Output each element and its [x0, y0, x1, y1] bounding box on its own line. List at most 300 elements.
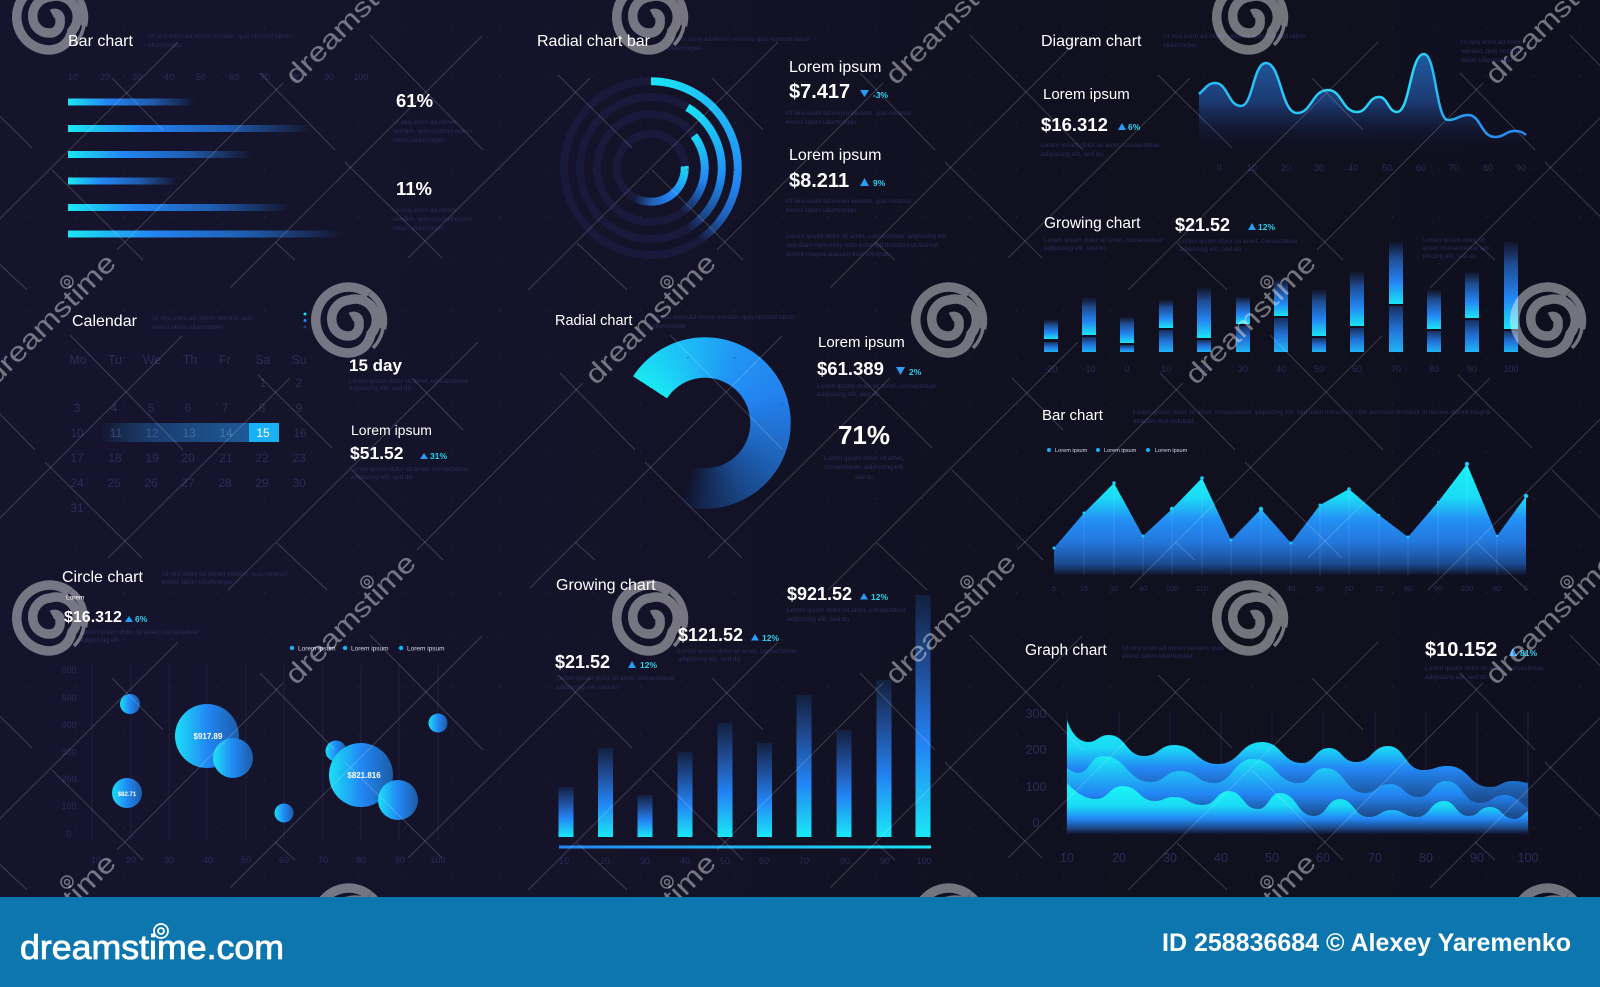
- axis labels: 0: [1124, 364, 1130, 374]
- side note: [1461, 39, 1524, 64]
- axis labels: 80: [840, 856, 850, 866]
- axis labels: 70: [1391, 364, 1401, 374]
- panel: circle chart: [61, 569, 448, 865]
- x axis labels: 50: [241, 855, 251, 865]
- x axis labels: 10: [91, 855, 101, 865]
- stat $121.52: [678, 625, 798, 663]
- stat $7.417: -3%: [873, 90, 889, 100]
- axis labels: 80: [1429, 364, 1439, 374]
- descriptions: adipiscing elit, sed do: [1044, 245, 1107, 252]
- date grid: 4: [111, 401, 118, 415]
- panel: bar chart right: [1042, 407, 1528, 593]
- y axis labels: 100: [61, 801, 77, 811]
- x axis labels: 80: [1419, 851, 1433, 865]
- descriptions: adipiscing elit, sed do: [1179, 246, 1242, 253]
- stat $21.52: $21.52: [555, 652, 610, 672]
- date grid: 8: [259, 401, 266, 415]
- heading: Bar chart: [68, 33, 133, 50]
- axis labels: 70: [1449, 163, 1459, 173]
- axis labels: 100: [916, 856, 932, 866]
- stat $21.52: [1175, 215, 1275, 235]
- date grid: 12: [145, 426, 159, 440]
- date grid: 7: [222, 401, 229, 415]
- stat $921.52: [787, 584, 907, 623]
- stat $921.52: adipiscing elit, sed do: [787, 616, 850, 623]
- description: Ut wisi enim ad minim veniam, quis: [152, 315, 254, 322]
- heading: Radial chart bar: [537, 33, 651, 50]
- axis labels: [1044, 364, 1519, 374]
- layered wave area chart: [1067, 720, 1528, 834]
- watermark text: dreamstime: [279, 547, 422, 690]
- description: Ut wisi enim ad minim veniam, quis: [1122, 645, 1224, 652]
- description: Ut wisi enim ad minim veniam, quis nostrud: [162, 571, 287, 578]
- radial bar arc: outer: [651, 77, 742, 242]
- descriptions: Lorem ipsum dolor sit: [1423, 237, 1485, 244]
- axis labels: 70: [799, 856, 809, 866]
- date grid: 6: [185, 401, 192, 415]
- axis labels: 30: [1110, 584, 1118, 593]
- stat 61%: veniam, quis nostrud exerci: [393, 128, 472, 135]
- legend: Lorem ipsum: [298, 646, 336, 652]
- stat 11%: [393, 178, 472, 232]
- axis labels: 10: [1161, 364, 1171, 374]
- bubble labels: $917.89: [194, 732, 223, 741]
- watermark text: dreamstime: [1479, 547, 1600, 690]
- stat $51.52: [350, 422, 470, 481]
- panel: radial chart: [555, 313, 937, 481]
- y axis labels: 300: [61, 747, 77, 757]
- stat $61.389: 2%: [909, 367, 922, 377]
- vertical bars: [558, 595, 930, 837]
- x axis labels: [91, 855, 446, 865]
- stat $10.152: Lorem ipsum dolor sit amet, consectetuer: [1425, 665, 1545, 672]
- axis labels: 50: [1382, 163, 1392, 173]
- line area chart: [1199, 54, 1526, 150]
- descriptions: piscing elit, sed do: [1423, 253, 1477, 260]
- axis labels: 5: [1052, 584, 1056, 593]
- paragraph: Lorem ipsum dolor sit amet, consectetuer adipiscing elit,: [786, 233, 948, 240]
- axis labels: 30: [640, 856, 650, 866]
- watermark text: dreamstime: [1179, 247, 1322, 390]
- weekday header: Tu: [108, 353, 122, 367]
- radial bar arc: inner: [634, 166, 689, 206]
- description: Ut wisi enim ad minim veniam, quis nostrud tation: [1163, 33, 1306, 40]
- panel: growing chart center: [555, 577, 932, 866]
- weekday header: Sa: [255, 353, 271, 367]
- axis labels: 20: [100, 72, 110, 82]
- y axis labels: 0: [1033, 816, 1040, 830]
- stat 15 day: adipiscing elit, sed do: [349, 385, 412, 392]
- stat $8.211: $8.211: [789, 170, 849, 192]
- stat 15 day: Lorem ipsum dolor sit amet, consectetuer: [349, 378, 469, 385]
- stat $16.312: 6%: [1128, 122, 1141, 132]
- horizontal bars: [68, 98, 343, 238]
- description: [1122, 645, 1224, 660]
- axis labels: 90: [880, 856, 890, 866]
- axis labels: 40: [164, 72, 174, 82]
- stat $16.312: Lorem: [66, 594, 84, 602]
- stat $51.52: Lorem ipsum dolor sit amet, consectetuer: [350, 466, 470, 473]
- description: Ut wisi enim ad minim veniam, quis nostrud tation: [148, 33, 291, 40]
- axis labels: 10: [68, 72, 78, 82]
- y axis labels: 400: [61, 720, 77, 730]
- date grid: 10: [70, 426, 84, 440]
- x axis labels: 20: [1112, 851, 1126, 865]
- description: [148, 33, 291, 49]
- x axis labels: 60: [1316, 851, 1330, 865]
- y axis labels: 600: [61, 665, 77, 675]
- stat $21.52: 12%: [640, 660, 657, 670]
- stat $61.389: adipiscing elit, sed do: [817, 391, 880, 398]
- stat $16.312: Lorem ipsum dolor sit amet, consectetuer: [80, 629, 200, 636]
- axis labels: 10: [559, 856, 569, 866]
- stat 11%: 11%: [396, 178, 432, 199]
- axis labels: 80: [1404, 584, 1412, 593]
- stat $21.52: [555, 652, 676, 691]
- date grid: 25: [107, 476, 121, 490]
- description: Ut wisi enim ad minim veniam, quis nostrud tation: [652, 314, 795, 321]
- panel: growing chart right: [1044, 215, 1519, 374]
- date grid: 24: [70, 476, 84, 490]
- y axis labels: [61, 665, 77, 839]
- stat $7.417: Lorem ipsum: [789, 59, 881, 76]
- stat 71%: sed do: [854, 474, 874, 481]
- x axis labels: 90: [395, 855, 405, 865]
- weekday header: Th: [183, 353, 197, 367]
- stat $10.152: $10.152: [1425, 639, 1497, 661]
- date grid: [70, 376, 307, 515]
- date grid: 3: [74, 401, 81, 415]
- heading: Growing chart: [1044, 215, 1141, 232]
- footer band: [0, 897, 1600, 987]
- date grid: 30: [292, 476, 306, 490]
- stat $51.52: $51.52: [350, 443, 404, 463]
- x axis labels: 90: [1470, 851, 1484, 865]
- date grid: 18: [108, 451, 122, 465]
- description: [652, 314, 795, 330]
- date grid: 5: [148, 401, 155, 415]
- axis labels: 90: [324, 72, 334, 82]
- x axis labels: 10: [1060, 851, 1074, 865]
- bubbles: [112, 694, 448, 822]
- axis labels: [68, 72, 369, 82]
- axis labels: 40: [1139, 584, 1147, 593]
- stat $61.389: [817, 334, 937, 398]
- axis labels: 90: [1516, 163, 1526, 173]
- description: exerci tation ullamcorper: [152, 324, 224, 331]
- axis labels: 60: [1416, 163, 1426, 173]
- axis labels: -20: [1044, 364, 1058, 374]
- description: [1163, 33, 1306, 49]
- bubble labels: $821.816: [347, 771, 381, 780]
- paragraph: dolore magna aliquam erat volutpat.: [786, 251, 890, 258]
- stat $121.52: 12%: [762, 633, 779, 643]
- date grid: 27: [181, 476, 195, 490]
- x axis labels: 50: [1265, 851, 1279, 865]
- stat $21.52: adipiscing elit, sed do: [556, 684, 619, 691]
- axis labels: 40: [680, 856, 690, 866]
- axis labels: 90: [1434, 584, 1442, 593]
- stat 71%: [823, 420, 905, 481]
- stat 15 day: [349, 356, 469, 392]
- axis labels: 50: [196, 72, 206, 82]
- stat 11%: Ut wisi enim ad minim: [393, 207, 456, 214]
- descriptions: Lorem ipsum dolor sit amet, consectetuer: [1044, 237, 1164, 244]
- axis labels: 60: [1352, 364, 1362, 374]
- axis labels: 90: [1467, 364, 1477, 374]
- panel: graph chart: [1025, 639, 1545, 865]
- stat $10.152: [1425, 639, 1545, 681]
- stat $10.152: 81%: [1520, 648, 1537, 658]
- axis labels: 80: [292, 72, 302, 82]
- axis labels: 100: [353, 72, 369, 82]
- x axis labels: 40: [1214, 851, 1228, 865]
- bubble labels: [118, 732, 381, 798]
- description: exerci tation ullamcorper: [162, 579, 234, 586]
- stat 11%: tation ullamcorper: [393, 225, 445, 232]
- watermark text: dreamstime: [579, 847, 722, 987]
- description: Lorem ipsum dolor sit amet, consectetuer adipiscing elit, sed diam nonummy nibh euismod tincidunt ut laoreet dolore magna: [1133, 409, 1491, 416]
- panel: calendar: [69, 312, 470, 515]
- legend: Lorem ipsum: [1104, 448, 1137, 454]
- stat $16.312: Lorem ipsum: [1043, 86, 1130, 103]
- x axis labels: 80: [356, 855, 366, 865]
- stat $8.211: 9%: [873, 178, 886, 188]
- panel: diagram chart: [1041, 33, 1526, 173]
- axis labels: 20: [1281, 163, 1291, 173]
- grid lines: [1067, 712, 1528, 835]
- stat 71%: 71%: [838, 420, 890, 450]
- x axis labels: 40: [203, 855, 213, 865]
- axis labels: 70: [260, 72, 270, 82]
- legend: [290, 646, 445, 652]
- legend: [1047, 448, 1188, 454]
- stat $7.417: $7.417: [789, 81, 850, 103]
- footer logo: dreamstime.com: [20, 929, 284, 967]
- x axis labels: 30: [164, 855, 174, 865]
- date grid: 19: [145, 451, 159, 465]
- axis labels: 40: [1287, 584, 1295, 593]
- mountain area chart: [1052, 462, 1528, 575]
- watermark text: dreamstime: [879, 547, 1022, 690]
- stat $7.417: [786, 59, 911, 126]
- description: [1133, 409, 1491, 425]
- y axis labels: 200: [61, 774, 77, 784]
- date grid: 1: [260, 376, 267, 390]
- stat $51.52: 31%: [430, 451, 447, 461]
- axis labels: [1216, 163, 1526, 173]
- date grid: 16: [293, 426, 307, 440]
- axis labels: 80: [1483, 163, 1493, 173]
- axis labels: -10: [1082, 364, 1096, 374]
- axis labels: 40: [1348, 163, 1358, 173]
- side note: Ut wisi enim ad minim: [1461, 39, 1524, 46]
- date grid: 31: [70, 501, 84, 515]
- descriptions: Lorem ipsum dolor sit amet, consectetuer: [1179, 238, 1299, 245]
- stat $7.417: Ut wisi enim ad minim veniam, quis nostrud: [786, 110, 911, 117]
- stat $8.211: exerci tation ullamcorper: [786, 207, 858, 214]
- axis labels: 60: [1345, 584, 1353, 593]
- stat $61.389: $61.389: [817, 358, 884, 379]
- stat $61.389: Lorem ipsum: [818, 334, 905, 351]
- heading: Circle chart: [62, 569, 143, 586]
- date grid: 20: [181, 451, 195, 465]
- stat 11%: veniam, quis nostrud exerci: [393, 216, 472, 223]
- radial chart donut: [619, 337, 791, 509]
- axis labels: 100: [1166, 584, 1178, 593]
- stat $121.52: Lorem ipsum dolor sit amet, consectetuer: [678, 648, 798, 655]
- stat $21.52: $21.52: [1175, 215, 1230, 235]
- stat $16.312: Lorem ipsum dolor sit amet, consectetuer: [1041, 142, 1161, 149]
- date grid: 29: [255, 476, 269, 490]
- date grid: 14: [219, 426, 233, 440]
- description: aliquam erat volutpat.: [1133, 418, 1195, 425]
- stat $16.312: [64, 594, 200, 644]
- stat 61%: [393, 90, 472, 144]
- watermark text: dreamstime: [1179, 847, 1322, 987]
- axis labels: 50: [1316, 584, 1324, 593]
- axis labels: [1052, 584, 1528, 593]
- description: ullamcorper: [652, 323, 687, 330]
- stat $51.52: Lorem ipsum: [351, 422, 432, 438]
- heading: Bar chart: [1042, 407, 1104, 424]
- grid lines: [92, 665, 438, 840]
- stat $8.211: Lorem ipsum: [789, 147, 881, 164]
- axis labels: 20: [1199, 364, 1209, 374]
- axis labels: 20: [600, 856, 610, 866]
- date grid: 11: [110, 426, 123, 440]
- axis labels: 0: [1216, 163, 1222, 173]
- side note: tation ullamcorper: [1461, 57, 1513, 64]
- stat $16.312: adipiscing elit, sed do: [1041, 151, 1104, 158]
- descriptions: amet, consectetuer adi: [1423, 245, 1489, 252]
- stat $921.52: $921.52: [787, 584, 852, 604]
- y axis labels: [1026, 707, 1046, 830]
- descriptions: [1044, 237, 1489, 260]
- heading: Radial chart: [555, 313, 632, 329]
- paragraph: sed diam nonummy nibh euismod tincidunt ut laoreet: [786, 242, 938, 249]
- radial bar arc: third: [681, 133, 709, 214]
- radial bar arc: second: [686, 104, 726, 230]
- stat $16.312: adipiscing elit: [80, 637, 119, 644]
- stat $61.389: Lorem ipsum dolor sit amet, consectetuer: [817, 383, 937, 390]
- selected day box: [249, 423, 279, 442]
- axis labels: 70: [1375, 584, 1383, 593]
- stat 71%: consectetuer, adipiscing elit,: [823, 464, 905, 471]
- axis labels: 30: [1314, 163, 1324, 173]
- legend: Lorem ipsum: [407, 646, 445, 652]
- stat $21.52: Lorem ipsum dolor sit amet, consectetuer: [556, 675, 676, 682]
- legend: Lorem ipsum: [1055, 448, 1088, 454]
- date grid: 15: [256, 426, 270, 440]
- side note: veniam, quis nostrud: [1461, 48, 1521, 55]
- date grid: 9: [296, 401, 303, 415]
- panel: radial chart bar: [537, 33, 948, 258]
- footer logo swirl: [154, 924, 168, 938]
- axis labels: [559, 856, 932, 866]
- description: [667, 36, 810, 52]
- weekday header: Mo: [69, 353, 87, 367]
- stat $8.211: Ut wisi enim ad minim veniam, quis nostrud: [786, 198, 911, 205]
- stat $921.52: Lorem ipsum dolor sit amet, consectetuer: [787, 607, 907, 614]
- date grid: 23: [292, 451, 306, 465]
- heading: Growing chart: [556, 577, 656, 594]
- stacked bars: [1044, 242, 1518, 352]
- date grid: 28: [218, 476, 232, 490]
- stat $121.52: adipiscing elit, sed do: [678, 656, 741, 663]
- stat 61%: 61%: [396, 90, 433, 111]
- heading: Graph chart: [1025, 642, 1108, 659]
- paragraph: [786, 233, 948, 258]
- y axis labels: 100: [1026, 780, 1046, 794]
- axis labels: 40: [1276, 364, 1286, 374]
- x axis labels: 70: [1368, 851, 1382, 865]
- heading: Calendar: [72, 313, 138, 330]
- stat $16.312: 6%: [135, 614, 148, 624]
- menu dots: [304, 312, 306, 328]
- weekday header: Su: [291, 353, 307, 367]
- description: ullamcorper: [148, 42, 183, 49]
- x axis labels: 100: [1518, 851, 1538, 865]
- stat 61%: Ut wisi enim ad minim: [393, 119, 456, 126]
- axis labels: 50: [1314, 364, 1324, 374]
- date grid: 26: [144, 476, 158, 490]
- stat 15 day: 15 day: [349, 356, 402, 375]
- axis labels: 100: [1503, 364, 1519, 374]
- axis labels: 30: [1238, 364, 1248, 374]
- stat $16.312: $16.312: [1041, 114, 1108, 135]
- description: ullamcorper: [667, 45, 702, 52]
- weekday header: Fr: [219, 353, 231, 367]
- axis labels: 110: [1196, 584, 1208, 593]
- weekday header: [69, 353, 307, 367]
- legend: Lorem ipsum: [351, 646, 389, 652]
- stat $21.52: 12%: [1258, 222, 1275, 232]
- stat $7.417: exerci tation ullamcorper: [786, 119, 858, 126]
- description: [152, 315, 254, 331]
- date grid: 21: [219, 451, 233, 465]
- date grid: 13: [182, 426, 196, 440]
- description: [162, 571, 287, 586]
- stat $121.52: $121.52: [678, 625, 743, 645]
- date grid: 17: [70, 451, 84, 465]
- legend: Lorem ipsum: [1155, 448, 1188, 454]
- y axis labels: 500: [61, 693, 77, 703]
- x axis labels: 100: [430, 855, 446, 865]
- stat $10.152: adipiscing elit, sed do: [1425, 674, 1488, 681]
- x axis labels: 30: [1163, 851, 1177, 865]
- description: ullamcorper: [1163, 42, 1198, 49]
- y axis labels: 0: [66, 829, 72, 839]
- stat 61%: tation ullamcorper: [393, 137, 445, 144]
- axis labels: 80: [1493, 584, 1501, 593]
- description: exerci tation ullamcorper: [1122, 653, 1194, 660]
- date grid: 2: [296, 376, 303, 390]
- axis labels: 60: [229, 72, 239, 82]
- selected range: [100, 423, 249, 442]
- watermark text: dreamstime: [579, 247, 722, 390]
- x axis labels: 20: [126, 855, 136, 865]
- y axis labels: 200: [1026, 743, 1046, 757]
- stat $921.52: 12%: [871, 592, 888, 602]
- stat $16.312: [1041, 86, 1161, 158]
- stat 71%: Lorem ipsum dolor sit amet,: [824, 455, 904, 462]
- weekday header: We: [143, 353, 161, 367]
- stat $51.52: adipiscing elit, sed do: [350, 474, 413, 481]
- stat $8.211: [786, 147, 911, 214]
- axis labels: 100: [1461, 584, 1473, 593]
- axis labels: 60: [759, 856, 769, 866]
